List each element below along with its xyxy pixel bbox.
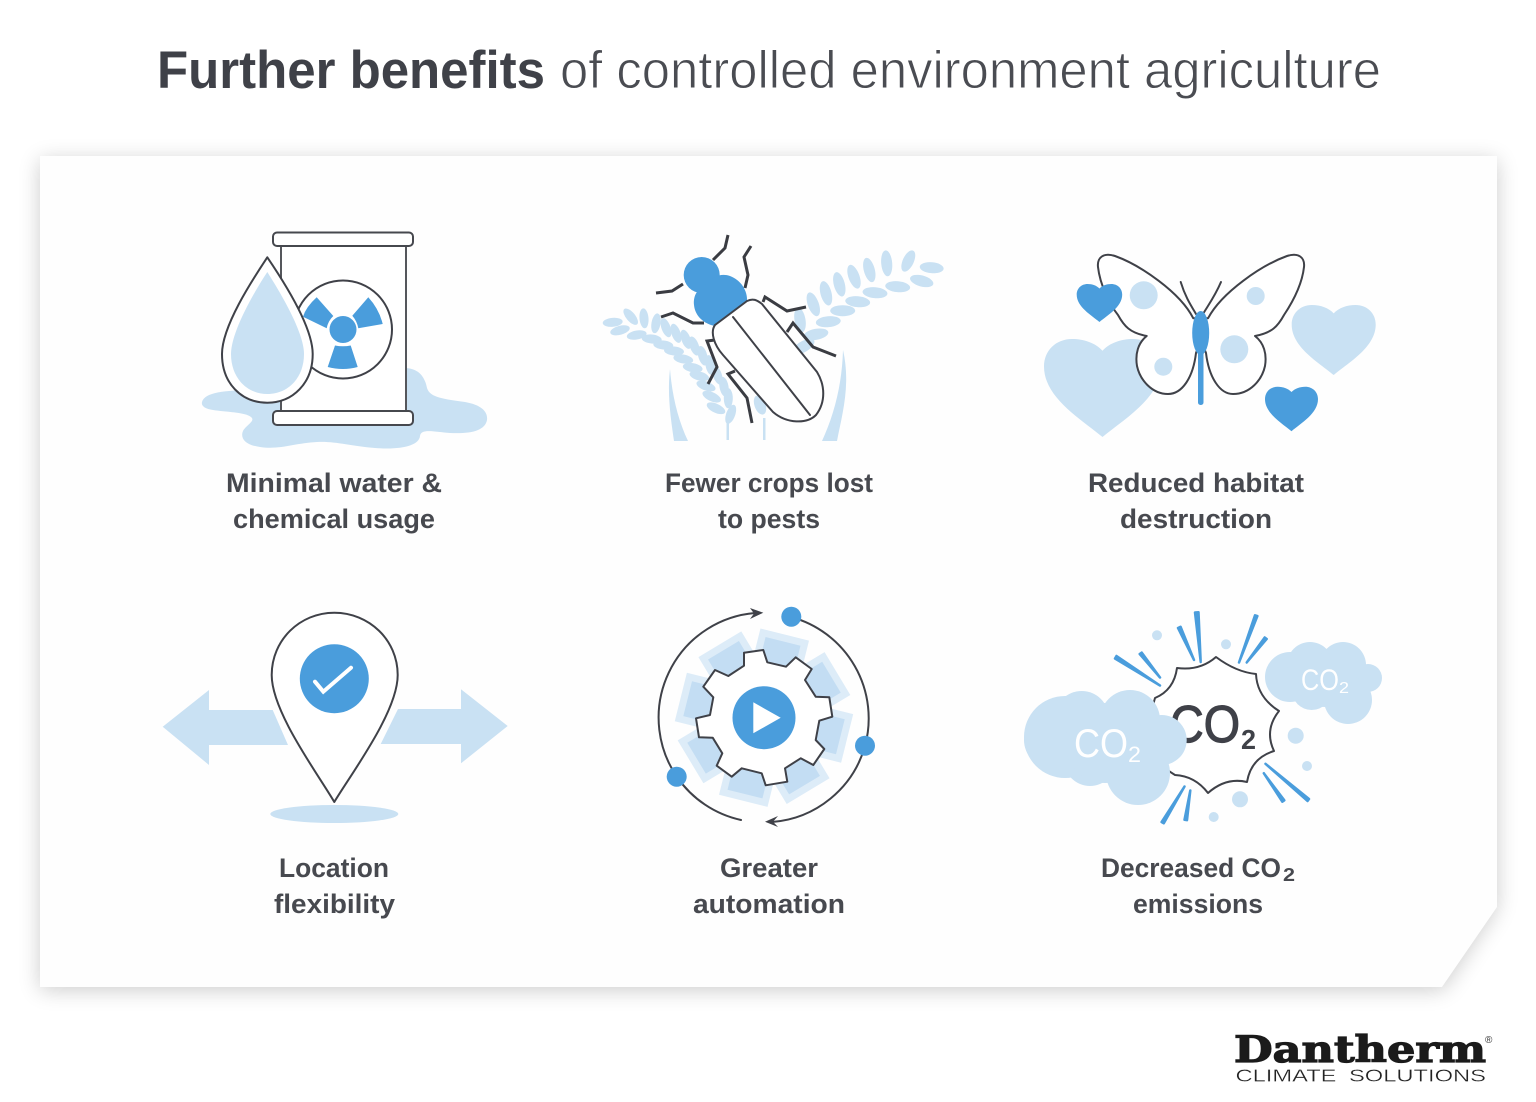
puddle: [202, 368, 487, 448]
burst subscript: 2: [1241, 724, 1256, 755]
beetle legs: [656, 235, 836, 423]
large heart left: [1044, 339, 1161, 437]
hands: [669, 369, 688, 441]
check badge: [300, 644, 369, 713]
barrel bottom cap: [273, 411, 413, 425]
label: water and chemical: Minimal water &: [226, 468, 442, 498]
burst rays: [1115, 612, 1309, 823]
cycle dots: [667, 607, 875, 787]
play triangle: [753, 702, 781, 733]
butterfly wings: [1098, 255, 1304, 394]
burst text: CO: [1170, 696, 1240, 754]
label: pests: Fewer crops lost: [665, 468, 873, 498]
left cloud text: CO: [1074, 722, 1128, 766]
check mark: [315, 668, 351, 692]
label: emissions: 2: [1283, 865, 1295, 885]
stems: [726, 418, 766, 440]
right cloud subscript: 2: [1339, 680, 1349, 697]
beetle shell: [713, 300, 823, 421]
logo: Dantherm: [1234, 1029, 1493, 1086]
logo: Dantherm: SOLUTIONS: [1349, 1066, 1486, 1086]
icon: butterfly and hearts: [1044, 255, 1376, 437]
right cloud: [1265, 642, 1382, 724]
label: emissions: [1101, 853, 1295, 919]
water drop inner: [231, 272, 304, 394]
label: pests: [665, 468, 873, 534]
beetle wing line: [733, 317, 810, 415]
label: location: [274, 853, 395, 919]
title: [157, 41, 1381, 100]
small heart blue left: [1077, 284, 1122, 322]
icon: beetle on wheat: [602, 235, 944, 441]
icon: location pin with arrows: [163, 613, 508, 823]
label: emissions: Decreased CO: [1101, 853, 1281, 883]
cycle arcs: [659, 613, 869, 822]
panel: benefits card: [40, 156, 1497, 990]
outer petals: [675, 628, 853, 807]
heart right: [1292, 305, 1376, 375]
logo: Dantherm: Dantherm: [1234, 1029, 1486, 1071]
label: automation: automation: [693, 889, 845, 919]
logo: Dantherm: ®: [1485, 1035, 1493, 1046]
icon: water drop and chemical barrel: [202, 232, 487, 448]
title: Further benefits: [157, 41, 545, 100]
right hand: [822, 350, 846, 441]
label: automation: [693, 853, 845, 919]
water drop: [222, 257, 313, 403]
right wheat: [751, 248, 944, 416]
label: emissions: emissions: [1133, 889, 1263, 919]
label: habitat: destruction: [1120, 504, 1272, 534]
small heart blue right: [1265, 387, 1318, 431]
radiation symbol: [294, 280, 392, 378]
label: automation: Greater: [720, 853, 818, 883]
cycle arrowheads: [750, 608, 778, 827]
barrel top cap: [273, 232, 413, 246]
beetle head: [684, 257, 747, 326]
label: location: Location: [279, 853, 389, 883]
label: habitat: [1088, 468, 1304, 534]
pin shadow: [270, 805, 398, 823]
left arrow: [163, 690, 288, 765]
logo: Dantherm: CLIMATE: [1236, 1066, 1336, 1086]
left cloud: [1024, 690, 1187, 805]
play button: [732, 686, 796, 749]
burst outline: [1150, 657, 1279, 793]
label: pests: to pests: [718, 504, 820, 534]
label: habitat: Reduced habitat: [1088, 468, 1304, 498]
title: of controlled environment agriculture: [560, 41, 1381, 100]
label: water and chemical: chemical usage: [233, 504, 435, 534]
butterfly antennae: [1181, 282, 1221, 314]
gear: [696, 650, 832, 785]
left wheat: [602, 306, 738, 425]
barrel body: [281, 246, 406, 411]
butterfly body: [1192, 311, 1209, 405]
small dots: [1152, 630, 1312, 822]
butterfly spots: [1130, 281, 1265, 376]
label: water and chemical: [226, 468, 442, 534]
right arrow: [381, 689, 508, 763]
inner petals: [683, 637, 845, 798]
left cloud subscript: 2: [1128, 742, 1141, 767]
pin: [272, 613, 398, 802]
label: location: flexibility: [274, 889, 395, 919]
icon: automation gear: [659, 607, 875, 827]
icon: CO2 burst and clouds: [1024, 612, 1382, 823]
right cloud text: CO: [1301, 664, 1339, 697]
